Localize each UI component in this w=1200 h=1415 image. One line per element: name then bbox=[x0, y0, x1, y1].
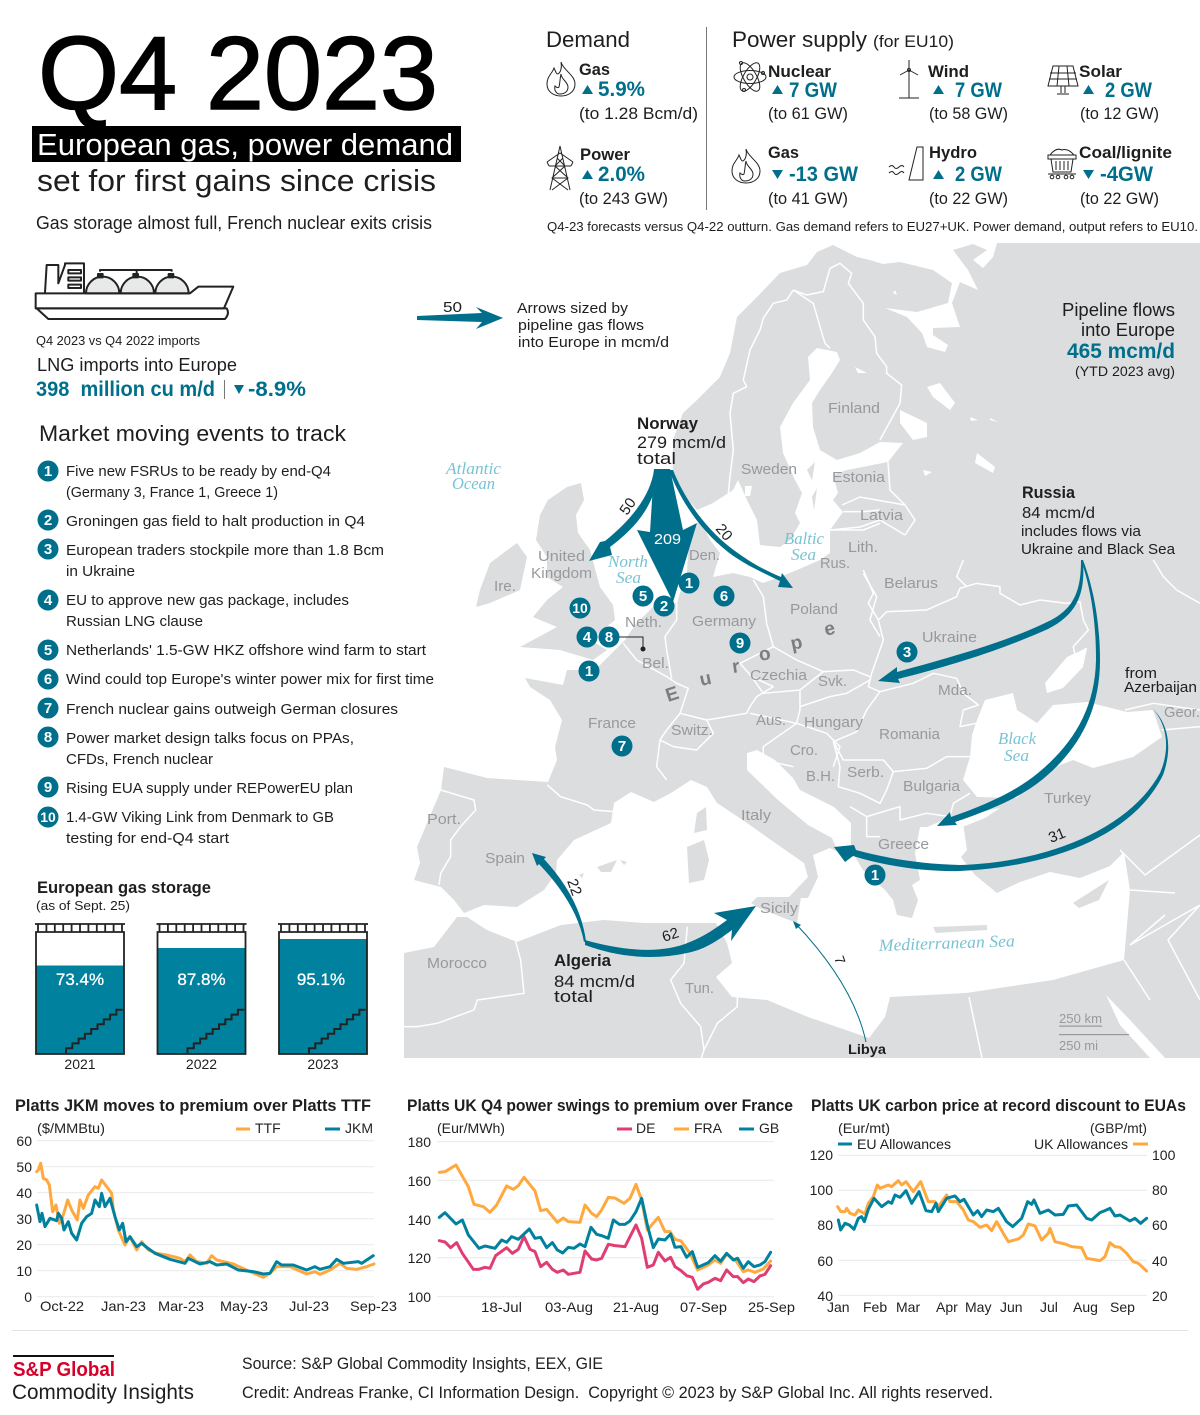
map country labels: Mda. bbox=[938, 682, 972, 699]
chart: UK power: (Eur/MWh) bbox=[437, 1120, 505, 1136]
map event markers: 3 bbox=[903, 644, 911, 661]
map country labels: Morocco bbox=[427, 955, 487, 972]
heading: demand: Demand bbox=[546, 27, 630, 52]
arrow: Norway 20 to Poland bbox=[669, 470, 793, 588]
gas supply figures bbox=[768, 143, 858, 208]
map country labels: Germany bbox=[692, 613, 757, 630]
gas supply figures: -13 GW bbox=[789, 163, 858, 186]
callout: Algeria: Algeria bbox=[554, 951, 612, 970]
map event markers bbox=[570, 572, 918, 886]
map country labels: Sicily bbox=[760, 900, 799, 917]
chart: UK power: 25-Sep bbox=[748, 1299, 795, 1315]
Europe curved label: E bbox=[663, 683, 682, 707]
callout: pipeline flows: Pipeline flows bbox=[1062, 300, 1175, 320]
map event markers: 10 bbox=[572, 600, 588, 616]
chart: carbon price: 80 bbox=[1152, 1182, 1168, 1198]
callout: Algeria: total bbox=[554, 987, 593, 1006]
map country labels: Czechia bbox=[750, 667, 808, 684]
chart: carbon price: 100 bbox=[810, 1182, 833, 1198]
power demand figures: (to 243 GW) bbox=[579, 189, 668, 208]
callout: pipeline flows bbox=[1062, 300, 1175, 379]
chart: JKM vs TTF: 60 bbox=[16, 1133, 32, 1149]
callout: Russia: Ukraine and Black Sea bbox=[1021, 541, 1176, 558]
list: events: 1 bbox=[44, 463, 52, 480]
chart: JKM vs TTF: Sep-23 bbox=[350, 1298, 397, 1314]
wind figures bbox=[928, 62, 1008, 123]
map country labels: B.H. bbox=[806, 768, 835, 785]
map country labels: Sweden bbox=[741, 461, 797, 478]
hydro figures: (to 22 GW) bbox=[929, 189, 1008, 208]
storage note: (as of Sept. 25) bbox=[36, 898, 130, 913]
list: events bbox=[38, 460, 434, 847]
chart: UK power: GB bbox=[759, 1120, 779, 1136]
callout: Russia: includes flows via bbox=[1021, 523, 1142, 540]
map event markers: 8 bbox=[605, 629, 613, 646]
gas demand figures: (to 1.28 Bcm/d) bbox=[579, 104, 698, 123]
icon: atom bbox=[734, 60, 766, 94]
map event markers: 5 bbox=[639, 588, 647, 605]
list: events: EU to approve new gas package, includes bbox=[66, 592, 349, 609]
map country labels: Latvia bbox=[860, 507, 904, 524]
chart: carbon price: Aug bbox=[1073, 1299, 1098, 1315]
list: events: 7 bbox=[44, 700, 52, 717]
arrow legend: 50 bbox=[443, 299, 462, 316]
scale bar: 250 km bbox=[1059, 1011, 1102, 1026]
map country labels: Bel. bbox=[642, 655, 669, 672]
map country labels: Port. bbox=[427, 811, 461, 828]
wind figures: (to 58 GW) bbox=[929, 104, 1008, 123]
list: events: Five new FSRUs to be ready by end-Q4 bbox=[66, 463, 331, 480]
map event markers: 2 bbox=[660, 598, 668, 615]
strapline: Gas storage almost full, French nuclear exits crisis bbox=[36, 213, 432, 233]
list: events: CFDs, French nuclear bbox=[66, 751, 213, 768]
chart: JKM vs TTF: 50 bbox=[16, 1159, 32, 1175]
chart: carbon price bbox=[810, 1096, 1186, 1315]
solar figures: (to 12 GW) bbox=[1080, 104, 1159, 123]
map country labels: United bbox=[538, 548, 585, 565]
LNG figure bbox=[36, 378, 306, 401]
map country labels: Cro. bbox=[790, 742, 818, 759]
callout: Algeria: 84 mcm/d bbox=[554, 972, 635, 991]
list: events: Groningen gas field to halt production in Q4 bbox=[66, 513, 365, 530]
sea labels: Sea bbox=[1004, 746, 1029, 765]
hydro figures bbox=[929, 143, 1008, 208]
chart: UK power: DE bbox=[636, 1120, 655, 1136]
wind figures: Wind bbox=[928, 62, 969, 81]
chart title: Platts JKM moves to premium over Platts TTF bbox=[15, 1096, 371, 1115]
icon: solar panel bbox=[1048, 66, 1078, 94]
callout: from Azerbaijan: Azerbaijan bbox=[1124, 679, 1197, 696]
tank 2023 bbox=[278, 924, 368, 1072]
map country labels: Kingdom bbox=[531, 565, 592, 582]
map country labels: Den. bbox=[689, 547, 720, 564]
list: events: testing for end-Q4 start bbox=[66, 830, 230, 847]
chart: carbon price: Sep bbox=[1110, 1299, 1135, 1315]
chart: carbon price: EU Allowances bbox=[857, 1136, 951, 1152]
callout: pipeline flows: (YTD 2023 avg) bbox=[1075, 363, 1175, 379]
tank 2022: 87.8% bbox=[177, 970, 226, 989]
LNG caption: Q4 2023 vs Q4 2022 imports bbox=[36, 333, 200, 348]
arrow: Algeria to Spain 22 bbox=[532, 853, 586, 942]
map country labels bbox=[427, 400, 1200, 997]
map background bbox=[404, 243, 1200, 1060]
tank 2022: 2022 bbox=[186, 1056, 217, 1072]
solar figures: Solar bbox=[1079, 62, 1122, 81]
callout: Norway: Norway bbox=[637, 414, 699, 433]
chart: carbon price: Apr bbox=[936, 1299, 958, 1315]
arrow: Norway 209 main flow bbox=[637, 469, 697, 602]
sea labels: North bbox=[607, 552, 648, 571]
map country labels: Turkey bbox=[1044, 790, 1092, 807]
coal figures bbox=[1079, 143, 1172, 208]
tank 2021 bbox=[35, 924, 125, 1072]
nuclear figures: (to 61 GW) bbox=[768, 104, 848, 123]
list: events: French nuclear gains outweigh German closures bbox=[66, 701, 398, 718]
chart: carbon price: Mar bbox=[896, 1299, 920, 1315]
icon: gas flame supply bbox=[732, 149, 760, 183]
map country labels: Belarus bbox=[884, 575, 938, 592]
icon: gas flame bbox=[547, 62, 575, 96]
map country labels: Italy bbox=[741, 807, 772, 824]
chart: carbon price: 20 bbox=[1152, 1288, 1168, 1304]
solar figures bbox=[1079, 62, 1159, 123]
list: events: 6 bbox=[44, 671, 52, 688]
chart: UK power: 160 bbox=[408, 1173, 431, 1189]
list: events: 1.4-GW Viking Link from Denmark to GB bbox=[66, 809, 334, 826]
callout: from Azerbaijan: from bbox=[1125, 665, 1157, 682]
callout: Norway: 279 mcm/d bbox=[637, 433, 726, 452]
tank 2023: 2023 bbox=[307, 1056, 339, 1072]
arrow: Norway 50 to UK bbox=[589, 470, 660, 561]
chart: JKM vs TTF: Oct-22 bbox=[40, 1298, 84, 1314]
heading: market moving events: Market moving events to track bbox=[39, 421, 347, 446]
tank 2022 bbox=[156, 924, 246, 1072]
list: events: in Ukraine bbox=[66, 563, 135, 580]
map country labels: Poland bbox=[790, 601, 838, 618]
arrow: Russia via Black Sea bbox=[937, 560, 1100, 826]
chart: carbon price: Feb bbox=[863, 1299, 887, 1315]
chart: JKM vs TTF: 10 bbox=[16, 1263, 32, 1279]
heading: power supply: Power supply bbox=[732, 27, 867, 52]
chart: carbon price: Jul bbox=[1040, 1299, 1058, 1315]
list: events: 5 bbox=[44, 642, 52, 659]
chart: JKM vs TTF: Mar-23 bbox=[158, 1298, 204, 1314]
list: events: 2 bbox=[44, 512, 52, 529]
map event markers: 1 bbox=[685, 575, 693, 592]
arrow: Norway 209 main flow: 209 bbox=[654, 531, 681, 548]
list: events: (Germany 3, France 1, Greece 1) bbox=[66, 484, 278, 501]
map event markers: 1 bbox=[585, 663, 593, 680]
coal figures: -4GW bbox=[1100, 163, 1153, 186]
gas demand figures bbox=[579, 60, 698, 123]
title: Q4 2023 bbox=[38, 16, 438, 132]
icon: coal wagon bbox=[1048, 149, 1076, 179]
arrow: Algeria to Spain 22: 22 bbox=[563, 877, 585, 898]
tank 2023: 95.1% bbox=[297, 970, 345, 989]
chart: JKM vs TTF: Jul-23 bbox=[289, 1298, 329, 1314]
arrow: Russia via Ukraine bbox=[878, 560, 1083, 683]
heading: gas storage: European gas storage bbox=[37, 878, 211, 897]
source line: Source: S&P Global Commodity Insights, EEX, GIE bbox=[242, 1355, 603, 1373]
sea labels: Mediterranean Sea bbox=[877, 931, 1015, 955]
callout: pipeline flows: 465 mcm/d bbox=[1067, 340, 1175, 363]
map country labels: Neth. bbox=[625, 614, 662, 631]
chart: JKM vs TTF: May-23 bbox=[220, 1298, 268, 1314]
list: events: 3 bbox=[44, 541, 52, 558]
chart: UK power: 03-Aug bbox=[545, 1299, 593, 1315]
Europe curved label: r bbox=[731, 656, 742, 678]
hydro figures: Hydro bbox=[929, 143, 977, 162]
map country labels: Rus. bbox=[820, 555, 850, 572]
chart: JKM vs TTF: ($/MMBtu) bbox=[37, 1120, 105, 1136]
chart: carbon price: 60 bbox=[817, 1253, 833, 1269]
list: events: 10 bbox=[40, 809, 56, 825]
map country labels: Bulgaria bbox=[903, 778, 961, 795]
sea labels: Black bbox=[998, 729, 1036, 748]
map country labels: Lith. bbox=[848, 539, 878, 556]
chart: JKM vs TTF bbox=[15, 1096, 397, 1314]
Europe curved label: p bbox=[789, 632, 804, 655]
chart: carbon price: 60 bbox=[1152, 1217, 1168, 1233]
chart: UK power: 100 bbox=[408, 1289, 431, 1305]
arrow: Algeria to Sicily 62: 62 bbox=[660, 924, 681, 946]
tank 2021: 2021 bbox=[64, 1056, 96, 1072]
map country labels: Estonia bbox=[832, 469, 886, 486]
chart: carbon price: 120 bbox=[810, 1147, 833, 1163]
wind figures: 7 GW bbox=[955, 79, 1002, 102]
chart: UK power: 180 bbox=[408, 1134, 431, 1150]
heading note: (for EU10) bbox=[873, 32, 954, 51]
chart: carbon price: (GBP/mt) bbox=[1090, 1120, 1147, 1136]
chart: carbon price: (Eur/mt) bbox=[838, 1120, 890, 1136]
list: events: Netherlands' 1.5-GW HKZ offshore wind farm to start bbox=[66, 642, 427, 659]
chart: JKM vs TTF: JKM bbox=[345, 1120, 373, 1136]
chart: UK power: 21-Aug bbox=[613, 1299, 659, 1315]
chart: UK power: 18-Jul bbox=[481, 1299, 522, 1315]
sea labels: Sea bbox=[791, 545, 816, 564]
icon: hydro dam bbox=[889, 147, 923, 180]
gas supply figures: Gas bbox=[768, 143, 799, 162]
gas demand figures: 5.9% bbox=[598, 78, 645, 101]
list: events: Russian LNG clause bbox=[66, 613, 203, 630]
map country labels: Finland bbox=[828, 400, 880, 417]
chart: UK power: 140 bbox=[408, 1212, 431, 1228]
map event markers: 7 bbox=[618, 738, 626, 755]
panel: demand bbox=[546, 27, 698, 208]
coal figures: Coal/lignite bbox=[1079, 143, 1172, 162]
list: events: Wind could top Europe's winter power mix for first time bbox=[66, 671, 434, 688]
gas supply figures: (to 41 GW) bbox=[768, 189, 848, 208]
map country labels: Geor. bbox=[1164, 704, 1200, 721]
power demand figures: 2.0% bbox=[598, 163, 645, 186]
chart: JKM vs TTF: Jan-23 bbox=[101, 1298, 146, 1314]
chart: carbon price: Jan bbox=[827, 1299, 850, 1315]
list: events: Power market design talks focus on PPAs, bbox=[66, 730, 354, 747]
arrow legend: Arrows sized by bbox=[517, 300, 629, 317]
logo: S&P Global Commodity Insights bbox=[12, 1355, 194, 1404]
chart: JKM vs TTF: 30 bbox=[16, 1211, 32, 1227]
icon: pylon bbox=[547, 146, 573, 190]
map event markers: 4 bbox=[583, 629, 592, 646]
callout: Russia: Russia bbox=[1022, 483, 1076, 502]
logo: S&P Global Commodity Insights: Commodity Insights bbox=[12, 1381, 194, 1404]
Europe curved label bbox=[663, 618, 838, 707]
map country labels: Ukraine bbox=[922, 629, 977, 646]
chart: JKM vs TTF: 0 bbox=[24, 1289, 32, 1305]
icon: LNG ship bbox=[36, 263, 233, 319]
list: events: Rising EUA supply under REPowerEU plan bbox=[66, 780, 353, 797]
gas demand figures: Gas bbox=[579, 60, 610, 79]
map country labels: Ire. bbox=[494, 578, 516, 595]
chart: carbon price: 100 bbox=[1152, 1147, 1176, 1163]
chart title: Platts UK Q4 power swings to premium over France bbox=[407, 1096, 793, 1115]
sea labels: Baltic bbox=[784, 529, 824, 548]
map country labels: France bbox=[588, 715, 636, 732]
icon: wind turbine bbox=[899, 60, 919, 98]
subtitle bar: European gas, power demand bbox=[37, 127, 453, 162]
callout: Norway: total bbox=[637, 449, 676, 468]
subtitle second line: set for first gains since crisis bbox=[37, 163, 436, 198]
chart: carbon price: 40 bbox=[817, 1288, 833, 1304]
arrow: Norway 20 to Poland: 20 bbox=[712, 521, 736, 544]
chart: carbon price: 40 bbox=[1152, 1253, 1168, 1269]
arrow legend: pipeline gas flows bbox=[518, 317, 644, 334]
map country labels: Romania bbox=[879, 726, 941, 743]
scale bar bbox=[1059, 1011, 1129, 1053]
callout: Algeria bbox=[554, 951, 635, 1006]
logo: S&P Global Commodity Insights: S&P Global bbox=[13, 1359, 115, 1381]
chart: UK power: 07-Sep bbox=[680, 1299, 727, 1315]
callout: Russia bbox=[1021, 483, 1176, 558]
list: events: European traders stockpile more than 1.8 Bcm bbox=[66, 542, 384, 559]
sea labels bbox=[445, 459, 1036, 955]
Europe curved label: e bbox=[822, 618, 838, 641]
map country labels: Hungary bbox=[804, 714, 864, 731]
chart: carbon price: Jun bbox=[1000, 1299, 1023, 1315]
chart: JKM vs TTF: 40 bbox=[16, 1185, 32, 1201]
solar figures: 2 GW bbox=[1105, 79, 1152, 102]
arrow: Azerbaijan flow 31 bbox=[834, 708, 1168, 871]
panel: power supply bbox=[732, 27, 1172, 208]
LNG figure: -8.9% bbox=[248, 378, 306, 401]
chart: UK power bbox=[407, 1096, 795, 1315]
callout: Russia: 84 mcm/d bbox=[1022, 505, 1095, 522]
map event markers: 1 bbox=[871, 867, 879, 884]
arrow: Libya to Sicily 7 bbox=[793, 921, 866, 1042]
chart: JKM vs TTF: TTF bbox=[255, 1120, 281, 1136]
nuclear figures: Nuclear bbox=[768, 62, 831, 81]
footnote: Q4-23 forecasts versus Q4-22 outturn. Gas demand refers to EU27+UK. Power demand, output refers to EU10. bbox=[547, 220, 1198, 234]
sea labels: Atlantic bbox=[445, 459, 501, 478]
map country labels: Switz. bbox=[671, 722, 713, 739]
map country labels: Tun. bbox=[685, 980, 714, 997]
list: events: 4 bbox=[44, 592, 53, 609]
Europe curved label: o bbox=[757, 643, 772, 666]
map country labels: Serb. bbox=[847, 764, 884, 781]
power demand figures: Power bbox=[580, 145, 630, 164]
power demand figures bbox=[579, 145, 668, 208]
credit line: Credit: Andreas Franke, CI Information Design. Copyright © 2023 by S&P Global Inc. All rights reserved. bbox=[242, 1384, 993, 1402]
callout: from Azerbaijan bbox=[1124, 665, 1197, 696]
list: events: 9 bbox=[44, 779, 52, 796]
hydro figures: 2 GW bbox=[955, 163, 1002, 186]
arrow: Azerbaijan flow 31: 31 bbox=[1046, 825, 1068, 847]
sea labels: Ocean bbox=[452, 474, 495, 493]
arrow: Algeria to Sicily 62 bbox=[585, 906, 756, 957]
callout: Norway bbox=[637, 414, 726, 468]
map country labels: Spain bbox=[485, 850, 525, 867]
callout: Libya: Libya bbox=[848, 1041, 886, 1057]
Europe curved label: u bbox=[698, 668, 713, 691]
chart: UK power: FRA bbox=[694, 1120, 723, 1136]
chart: carbon price: UK Allowances bbox=[1034, 1136, 1128, 1152]
chart: UK power: 120 bbox=[408, 1250, 431, 1266]
chart: JKM vs TTF: 20 bbox=[16, 1237, 32, 1253]
LNG heading: LNG imports into Europe bbox=[37, 355, 237, 375]
scale bar: 250 mi bbox=[1059, 1038, 1098, 1053]
arrow legend bbox=[417, 299, 669, 351]
coal figures: (to 22 GW) bbox=[1080, 189, 1159, 208]
LNG figure: 398 million cu m/d bbox=[36, 378, 215, 401]
map country labels: Svk. bbox=[818, 673, 847, 690]
nuclear figures bbox=[768, 62, 848, 123]
list: events: 8 bbox=[44, 729, 52, 746]
map country labels: Aus. bbox=[756, 712, 786, 729]
arrow legend: into Europe in mcm/d bbox=[518, 334, 669, 351]
arrow: Libya to Sicily 7: 7 bbox=[831, 954, 849, 967]
arrow: Norway 50 to UK: 50 bbox=[616, 495, 640, 518]
chart: carbon price: 80 bbox=[817, 1217, 833, 1233]
map event markers: 9 bbox=[736, 635, 744, 652]
callout: pipeline flows: into Europe bbox=[1081, 320, 1175, 340]
sea labels: Sea bbox=[616, 568, 641, 587]
nuclear figures: 7 GW bbox=[789, 79, 837, 102]
chart: carbon price: May bbox=[965, 1299, 991, 1315]
map event markers: 6 bbox=[720, 588, 728, 605]
map country labels: Greece bbox=[878, 836, 929, 853]
tank 2021: 73.4% bbox=[56, 970, 104, 989]
